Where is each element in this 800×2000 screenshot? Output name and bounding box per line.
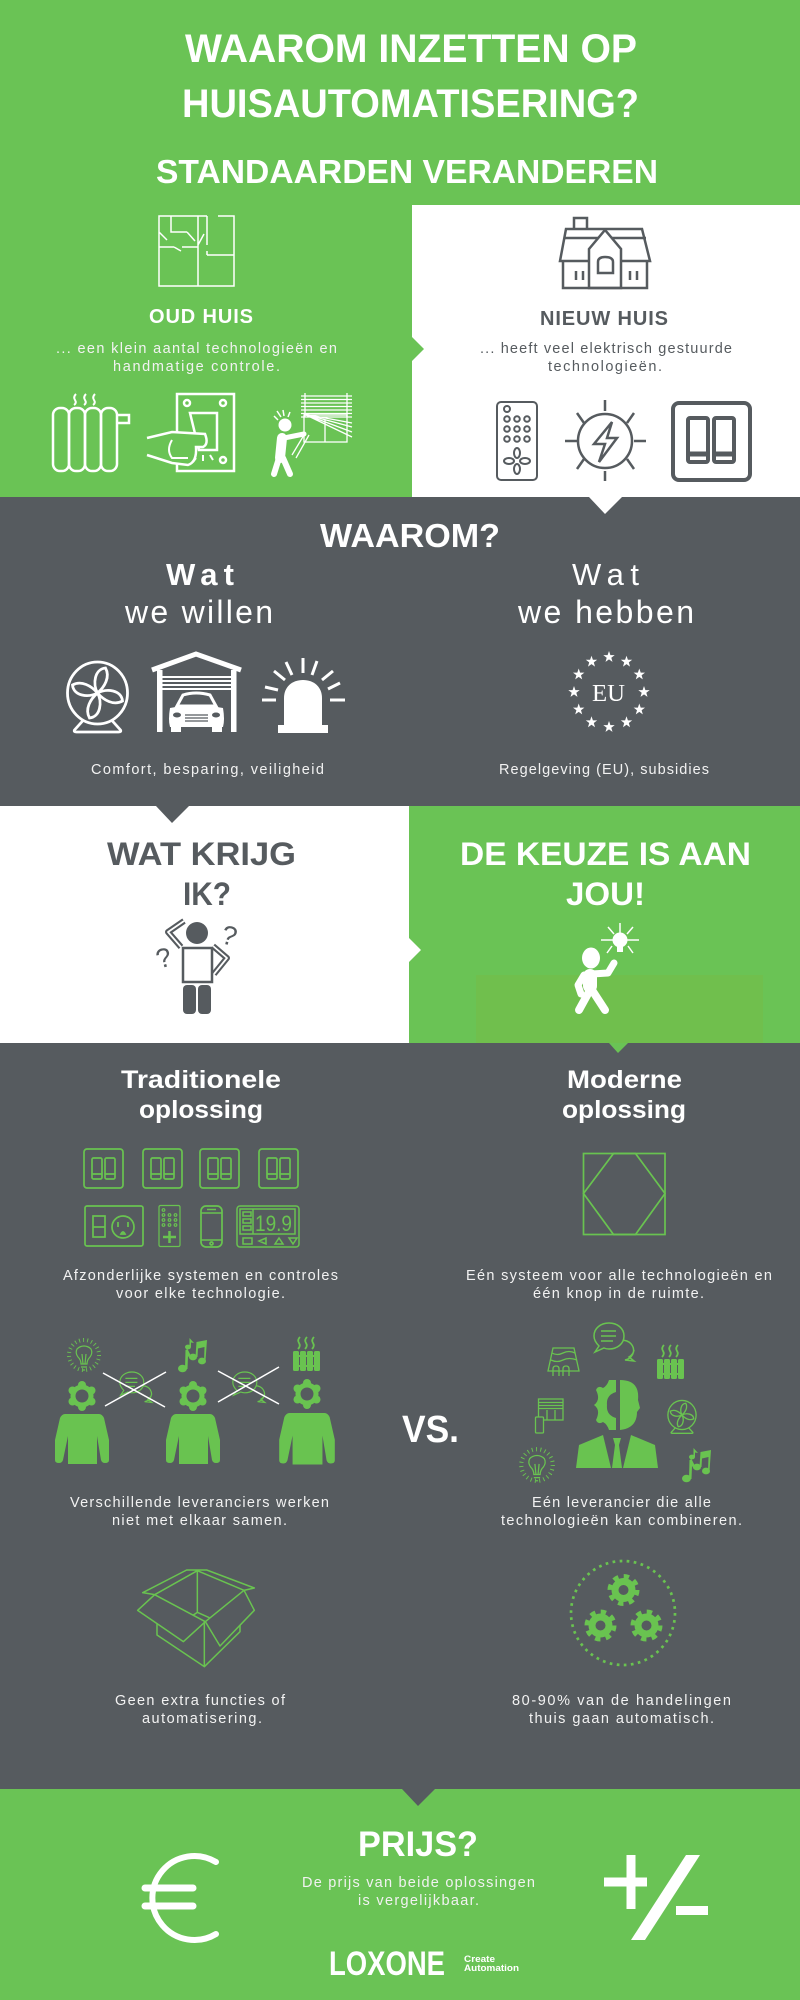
icon: loxone touch switch <box>584 1154 665 1234</box>
icon: thinking person: ? <box>153 942 175 975</box>
panel: de keuze is aan jou <box>460 836 751 1010</box>
heading: wat krijg ik: WAT KRIJG <box>107 836 296 872</box>
heading: oud huis: OUD HUIS <box>149 306 253 328</box>
icon: three vendors not cooperating <box>55 1337 335 1464</box>
panel: waarom <box>68 517 709 778</box>
label: vs: VS. <box>402 1409 459 1451</box>
panel: traditionele oplossing <box>55 1066 338 1727</box>
text: een leverancier <box>501 1495 742 1529</box>
icon: fan <box>68 662 128 732</box>
text: prijs <box>302 1875 535 1909</box>
text: verschillende leveranciers <box>70 1495 329 1529</box>
text: nieuw huis <box>480 341 732 375</box>
icon: chat bubbles <box>594 1323 634 1361</box>
heading: de keuze <box>460 836 751 912</box>
title: HUISAUTOMATISERING? <box>182 82 639 126</box>
panel: oud huis <box>53 216 352 474</box>
icon: thinking person <box>153 919 240 1014</box>
logo: loxone: LOXONE <box>329 1945 445 1983</box>
text: comfort: Comfort, besparing, veiligheid <box>91 762 324 778</box>
heading: nieuw huis: NIEUW HUIS <box>540 308 668 330</box>
panel: nieuw huis <box>480 218 750 481</box>
heading: traditionele oplossing <box>121 1066 281 1124</box>
heading: waarom: WAAROM? <box>320 517 500 554</box>
panel: prijs <box>145 1825 708 1983</box>
icon: light bulb <box>69 1340 99 1370</box>
heading: wat we hebben <box>517 557 694 630</box>
heading: traditionele oplossing: oplossing <box>139 1096 263 1124</box>
panel: wat krijg ik <box>107 836 296 1014</box>
text: regelgeving: Regelgeving (EU), subsidies <box>499 762 709 778</box>
icon: person with light bulb <box>578 923 639 1010</box>
text: geen extra functies <box>115 1693 286 1727</box>
icon: EU stars <box>568 651 650 732</box>
text: nieuw huis: technologieën. <box>548 359 662 375</box>
text: een systeem: Eén systeem voor alle technologieën en <box>466 1268 772 1284</box>
heading: wat we willen <box>124 557 273 630</box>
icon: single vendor with technologies <box>521 1323 711 1482</box>
text: afzonderlijke systemen: voor elke technologie. <box>116 1286 285 1302</box>
vendor figure one <box>55 1381 109 1464</box>
suit <box>576 1435 658 1468</box>
icon: small remote <box>159 1206 180 1246</box>
icon: floor plan <box>159 216 234 286</box>
icon: empty box <box>138 1570 254 1667</box>
icon: music notes <box>178 1338 207 1372</box>
icon: fan <box>668 1400 696 1433</box>
icon: thinking person: ? <box>218 919 240 952</box>
text: nieuw huis: ... heeft veel elektrisch gestuurde <box>480 341 732 357</box>
heading: wat krijg ik: IK? <box>183 876 231 912</box>
heading: de keuze: JOU! <box>566 876 645 912</box>
text: een systeem <box>466 1268 772 1302</box>
icon: alarm siren <box>262 658 345 733</box>
text: verschillende leveranciers: Verschillende leveranciers werken <box>70 1495 329 1511</box>
panel: moderne oplossing <box>466 1066 772 1727</box>
icon: outlet with switch <box>85 1206 143 1246</box>
icon: thermostat <box>237 1206 299 1247</box>
icon: radiator <box>53 394 129 471</box>
icon: roof <box>548 1348 579 1376</box>
text: prijs: De prijs van beide oplossingen <box>302 1875 535 1891</box>
heading: wat we willen: we willen <box>124 594 273 630</box>
text: afzonderlijke systemen <box>63 1268 338 1302</box>
heading: wat we hebben: Wat <box>572 557 639 592</box>
heading: moderne oplossing <box>562 1066 686 1124</box>
title <box>182 27 639 126</box>
text: prijs: is vergelijkbaar. <box>358 1893 479 1909</box>
icon: crossed-out chat two <box>218 1367 279 1404</box>
text: een systeem: één knop in de ruimte. <box>533 1286 704 1302</box>
text: afzonderlijke systemen: Afzonderlijke systemen en controles <box>63 1268 338 1284</box>
head: half gear half face <box>594 1380 640 1430</box>
text: oud huis: ... een klein aantal technologieën en <box>56 341 337 357</box>
icon: radiator <box>293 1337 320 1371</box>
icon: plus minus <box>604 1855 708 1940</box>
text: oud huis: handmatige controle. <box>113 359 280 375</box>
text: 80-90 percent: thuis gaan automatisch. <box>529 1711 714 1727</box>
icon: euro sign <box>145 1856 216 1940</box>
logo: loxone: Automation <box>464 1963 519 1973</box>
icon: hand on switch <box>147 394 234 471</box>
icon: phone <box>201 1206 222 1247</box>
text: geen extra functies: automatisering. <box>142 1711 262 1727</box>
text: verschillende leveranciers: niet met elkaar samen. <box>112 1513 287 1529</box>
heading: moderne oplossing: Moderne <box>567 1066 682 1094</box>
heading: wat we willen: Wat <box>166 557 234 592</box>
text: een leverancier: Eén leverancier die alle <box>532 1495 711 1511</box>
icon: shutters and phone <box>536 1399 563 1433</box>
icon: remote control <box>497 402 537 480</box>
icon: electricity sun <box>565 400 646 481</box>
vendor figure two <box>166 1381 220 1464</box>
heading: prijs: PRIJS? <box>358 1825 478 1864</box>
heading: traditionele oplossing: Traditionele <box>121 1066 281 1094</box>
icon: person with blinds <box>274 393 352 474</box>
vendor figure three <box>279 1379 335 1464</box>
heading: de keuze: DE KEUZE IS AAN <box>460 836 751 872</box>
logo: loxone: Create <box>464 1954 495 1964</box>
heading: standaarden veranderen: STANDAARDEN VERANDEREN <box>156 153 658 190</box>
heading: moderne oplossing: oplossing <box>562 1096 686 1124</box>
icon: music notes <box>682 1448 711 1482</box>
icon: radiator <box>657 1345 684 1379</box>
icon: gears in dotted circle <box>571 1561 675 1665</box>
text: geen extra functies: Geen extra functies of <box>115 1693 286 1709</box>
icon: four switches <box>84 1149 298 1188</box>
icon: light bulb <box>521 1449 553 1481</box>
icon: garage with car <box>152 654 241 732</box>
icon: EU stars: EU <box>592 681 625 707</box>
text: 80-90 percent <box>512 1693 731 1727</box>
text: een leverancier: technologieën kan combineren. <box>501 1513 742 1529</box>
text: 80-90 percent: 80-90% van de handelingen <box>512 1693 731 1709</box>
text: oud huis <box>56 341 337 375</box>
icon: wall switch <box>673 403 750 480</box>
icon: house <box>560 218 650 288</box>
heading: wat krijg ik <box>107 836 296 912</box>
heading: wat we hebben: we hebben <box>517 594 694 630</box>
title: WAAROM INZETTEN OP <box>185 27 637 71</box>
icon: crossed-out chat one <box>103 1372 166 1407</box>
icon: thermostat: 19.9 <box>255 1211 292 1236</box>
